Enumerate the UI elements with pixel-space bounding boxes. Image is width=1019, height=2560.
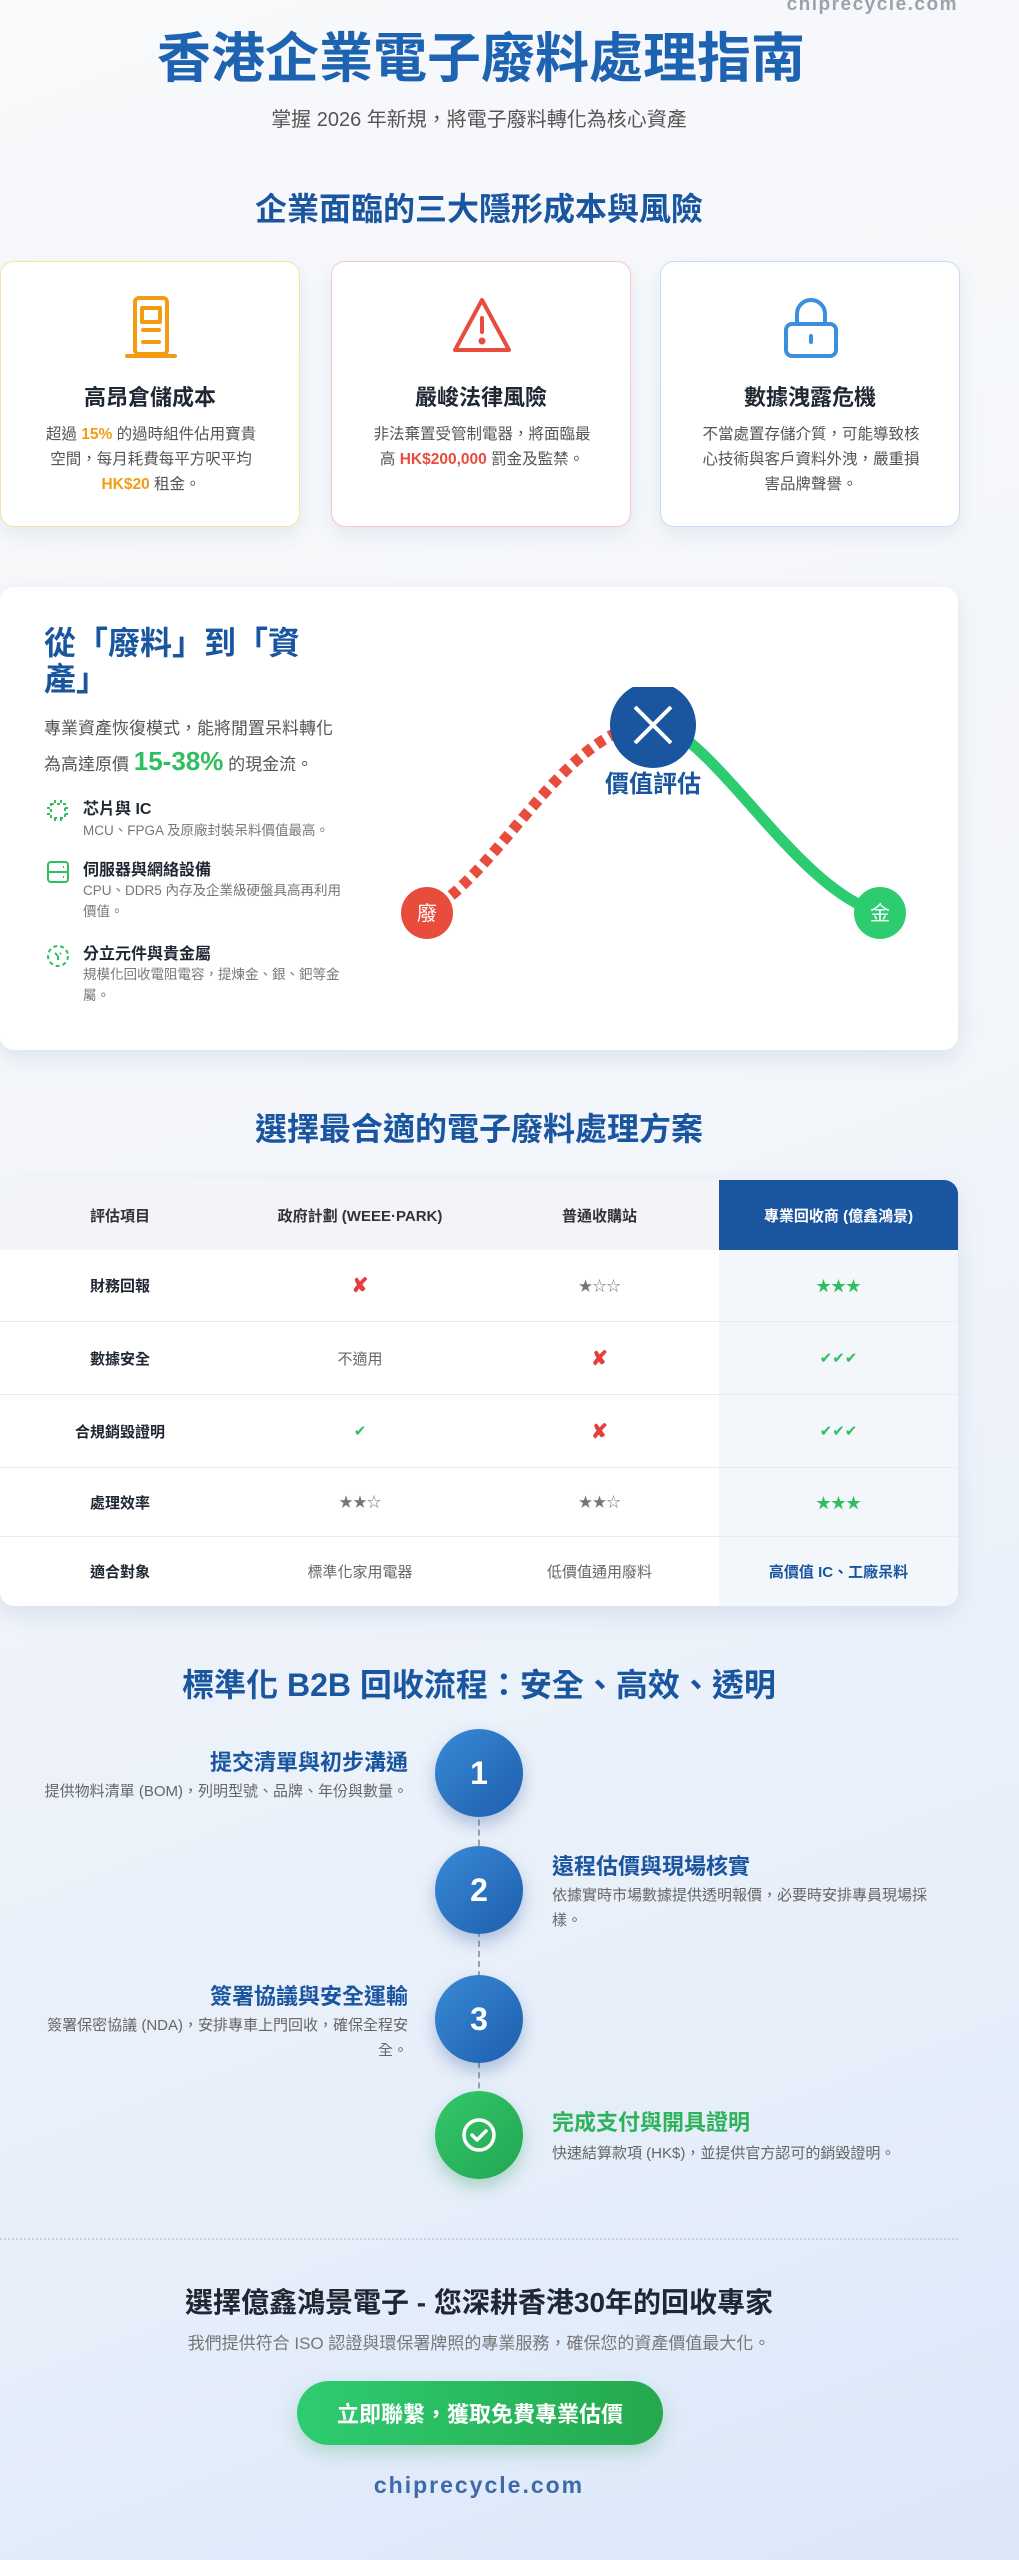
row: target: 低價值通用廢料 xyxy=(547,1564,652,1581)
row: compliance xyxy=(0,1395,958,1468)
step 4: 完成支付與開具證明 xyxy=(552,2110,750,2135)
panel: data leak card xyxy=(660,261,960,527)
row: data security: 數據安全 xyxy=(90,1350,150,1368)
list item: chips: 芯片與 IC xyxy=(83,801,151,818)
table header: 政府計劃 (WEEE·PARK) xyxy=(278,1208,442,1224)
row: data security: ✘ xyxy=(591,1348,608,1370)
step 3: 簽署協議與安全運輸 xyxy=(210,1984,408,2009)
step 1 xyxy=(45,1729,531,1833)
panel: data leak card: 不當處置存儲介質，可能導致核心技術與客戶資料外洩，嚴重損害品牌聲譽。 xyxy=(702,426,920,493)
list item: servers: 伺服器與網絡設備 xyxy=(83,862,211,879)
heading: comparison: 選擇最合適的電子廢料處理方案 xyxy=(255,1111,703,1147)
table header: 評估項目 xyxy=(90,1208,150,1224)
list item: components: 分立元件與貴金屬 xyxy=(83,946,211,963)
heading: waste to asset: 從「廢料」到「資產」 xyxy=(44,625,300,697)
list item: chips xyxy=(47,800,329,838)
icon: evaluation node xyxy=(610,682,696,768)
label: evaluation: 價值評估 xyxy=(605,771,701,798)
step 3: 3 xyxy=(470,2000,488,2036)
row: financial: 財務回報 xyxy=(90,1278,150,1295)
row: compliance: ✔✔✔ xyxy=(820,1423,857,1440)
row: compliance: 合規銷毀證明 xyxy=(75,1424,165,1440)
step 4: 快速結算款項 (HK$)，並提供官方認可的銷毀證明。 xyxy=(552,2145,895,2162)
step 1: 1 xyxy=(470,1754,488,1790)
icon: gold node: 金 xyxy=(870,902,890,925)
title: 香港企業電子廢料處理指南 xyxy=(157,29,805,89)
row: data security: 不適用 xyxy=(337,1350,382,1368)
step 2: 遠程估價與現場核實 xyxy=(552,1854,750,1879)
arrow: waste to evaluation (dashed red) xyxy=(448,730,613,900)
row: efficiency: ★★☆ xyxy=(578,1494,620,1510)
panel: storage cost card: 高昂倉儲成本 xyxy=(84,385,216,410)
arrow: evaluation to gold (green) xyxy=(688,738,859,908)
icon: lock xyxy=(784,298,838,358)
panel: waste to asset xyxy=(0,587,958,1050)
step 1: 提交清單與初步溝通 xyxy=(210,1750,408,1775)
panel: legal risk card: 嚴峻法律風險 xyxy=(415,385,547,410)
step 3: 簽署保密協議 (NDA)，安排專車上門回收，確保全程安全。 xyxy=(47,2017,408,2059)
panel: data leak card: 數據洩露危機 xyxy=(744,385,876,410)
row: financial: ★★★ xyxy=(816,1278,861,1295)
row: efficiency: ★★★ xyxy=(816,1494,861,1512)
list item: servers xyxy=(47,861,341,919)
step 4 xyxy=(427,2091,895,2195)
text block: intro: 專業資產恢復模式，能將閒置呆料轉化為高達原價 15-38% 的現金流。 xyxy=(44,719,333,776)
chart: value curve xyxy=(401,687,906,939)
footer text: 我們提供符合 ISO 認證與環保署牌照的專業服務，確保您的資產價值最大化。 xyxy=(188,2334,770,2353)
icon: gold node xyxy=(854,887,906,939)
heading: risks: 企業面臨的三大隱形成本與風險 xyxy=(255,191,703,227)
panel: storage cost card: 超過 15% 的過時組件佔用寶貴空間，每月耗費每平方呎平均 HK$20 租金。 xyxy=(46,426,256,493)
row: financial: ✘ xyxy=(352,1275,368,1297)
subtitle: 掌握 2026 年新規，將電子廢料轉化為核心資產 xyxy=(271,109,687,131)
step 2 xyxy=(427,1846,927,1950)
icon: warning xyxy=(453,298,512,352)
row: compliance: ✔ xyxy=(354,1423,366,1440)
icon: waste node xyxy=(401,887,453,939)
panel: legal risk card xyxy=(331,261,631,527)
icon: server xyxy=(47,861,69,883)
table header: 普通收購站 xyxy=(562,1208,637,1224)
row: efficiency: ★★☆ xyxy=(339,1494,381,1510)
list item: components xyxy=(47,945,340,1003)
step 2: 依據實時市場數據提供透明報價，必要時安排專員現場採樣。 xyxy=(552,1887,927,1929)
CTA button xyxy=(297,2381,663,2445)
table header xyxy=(0,1180,958,1250)
CTA button: 立即聯繫，獲取免費專業估價 xyxy=(337,2402,623,2427)
row: compliance: ✘ xyxy=(591,1420,608,1442)
step 3 xyxy=(47,1975,531,2079)
icon: chip xyxy=(47,800,68,821)
panel: legal risk card: 非法棄置受管制電器，將面臨最高 HK$200,000 罰金及監禁。 xyxy=(373,426,590,468)
icon: components xyxy=(47,945,69,967)
table header: 專業回收商 (億鑫鴻景) xyxy=(764,1208,913,1224)
row: data security xyxy=(0,1322,958,1395)
row: target xyxy=(90,1537,958,1606)
row: financial xyxy=(0,1250,958,1322)
row: financial: ★☆☆ xyxy=(578,1278,620,1294)
list item: servers: CPU、DDR5 內存及企業級硬盤具高再利用價值。 xyxy=(83,883,341,919)
panel: storage cost card xyxy=(0,261,300,527)
step 2: 2 xyxy=(470,1872,488,1908)
list item: components: 規模化回收電阻電容，提煉金、銀、鈀等金屬。 xyxy=(83,967,340,1003)
heading: process: 標準化 B2B 回收流程：安全、高效、透明 xyxy=(182,1667,776,1703)
comparison table xyxy=(0,1180,958,1606)
row: target: 標準化家用電器 xyxy=(307,1564,412,1581)
row: efficiency: 處理效率 xyxy=(90,1494,150,1512)
list item: chips: MCU、FPGA 及原廠封裝呆料價值最高。 xyxy=(83,823,329,838)
icon: storage xyxy=(125,296,177,358)
process timeline xyxy=(45,1729,927,2195)
row: data security: ✔✔✔ xyxy=(820,1350,857,1367)
row: efficiency xyxy=(0,1468,958,1537)
icon: waste node: 廢 xyxy=(417,902,437,925)
row: target: 適合對象 xyxy=(90,1564,150,1581)
footer site: chiprecycle.com xyxy=(374,2472,584,2498)
footer heading: 選擇億鑫鴻景電子 - 您深耕香港30年的回收專家 xyxy=(185,2287,773,2318)
step 1: 提供物料清單 (BOM)，列明型號、品牌、年份與數量。 xyxy=(45,1783,408,1800)
row: target: 高價值 IC、工廠呆料 xyxy=(769,1564,908,1581)
